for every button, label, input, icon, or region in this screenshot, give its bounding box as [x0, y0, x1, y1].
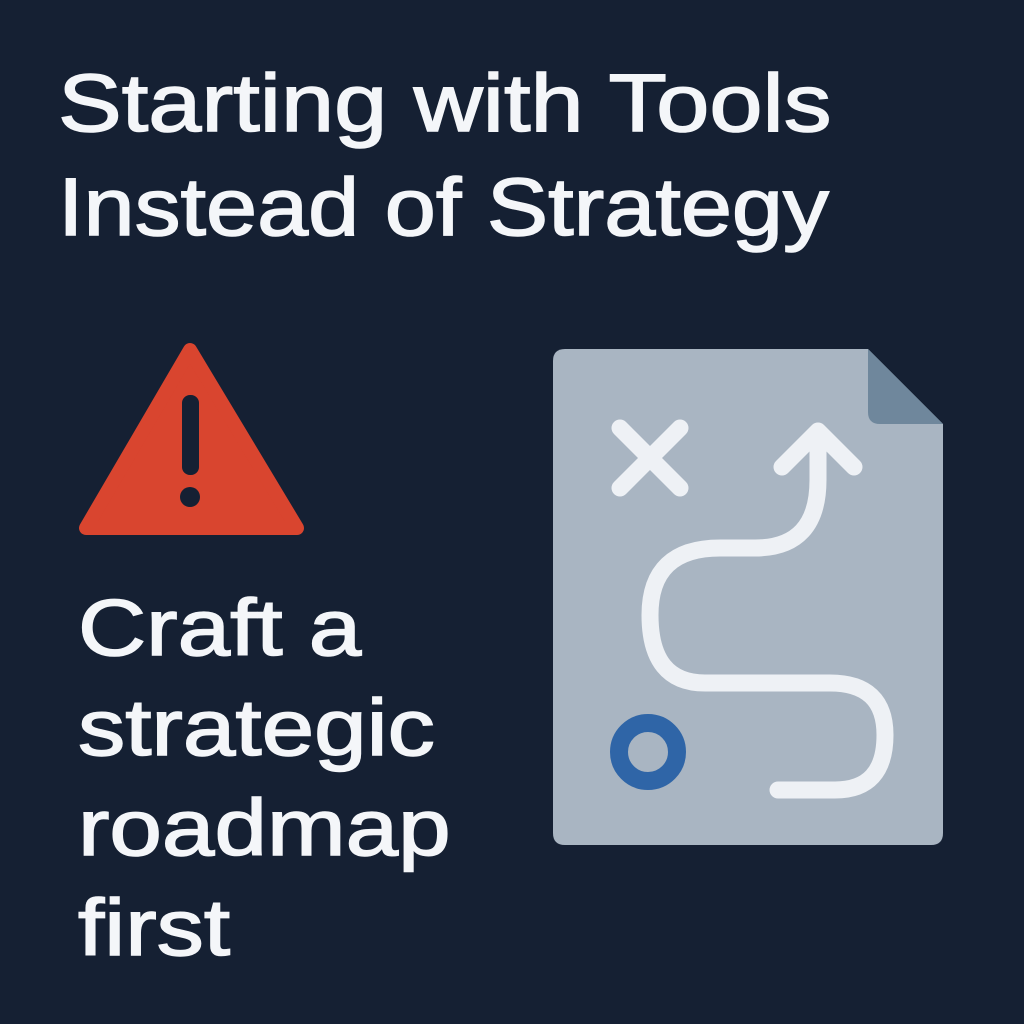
body text: strategic [78, 683, 435, 772]
body text [78, 583, 451, 972]
title line 2: Instead of Strategy [58, 162, 829, 253]
body text: Craft a [78, 583, 361, 672]
body text: first [78, 883, 230, 972]
title: Starting with Tools [58, 58, 831, 149]
body text: roadmap [78, 783, 451, 872]
